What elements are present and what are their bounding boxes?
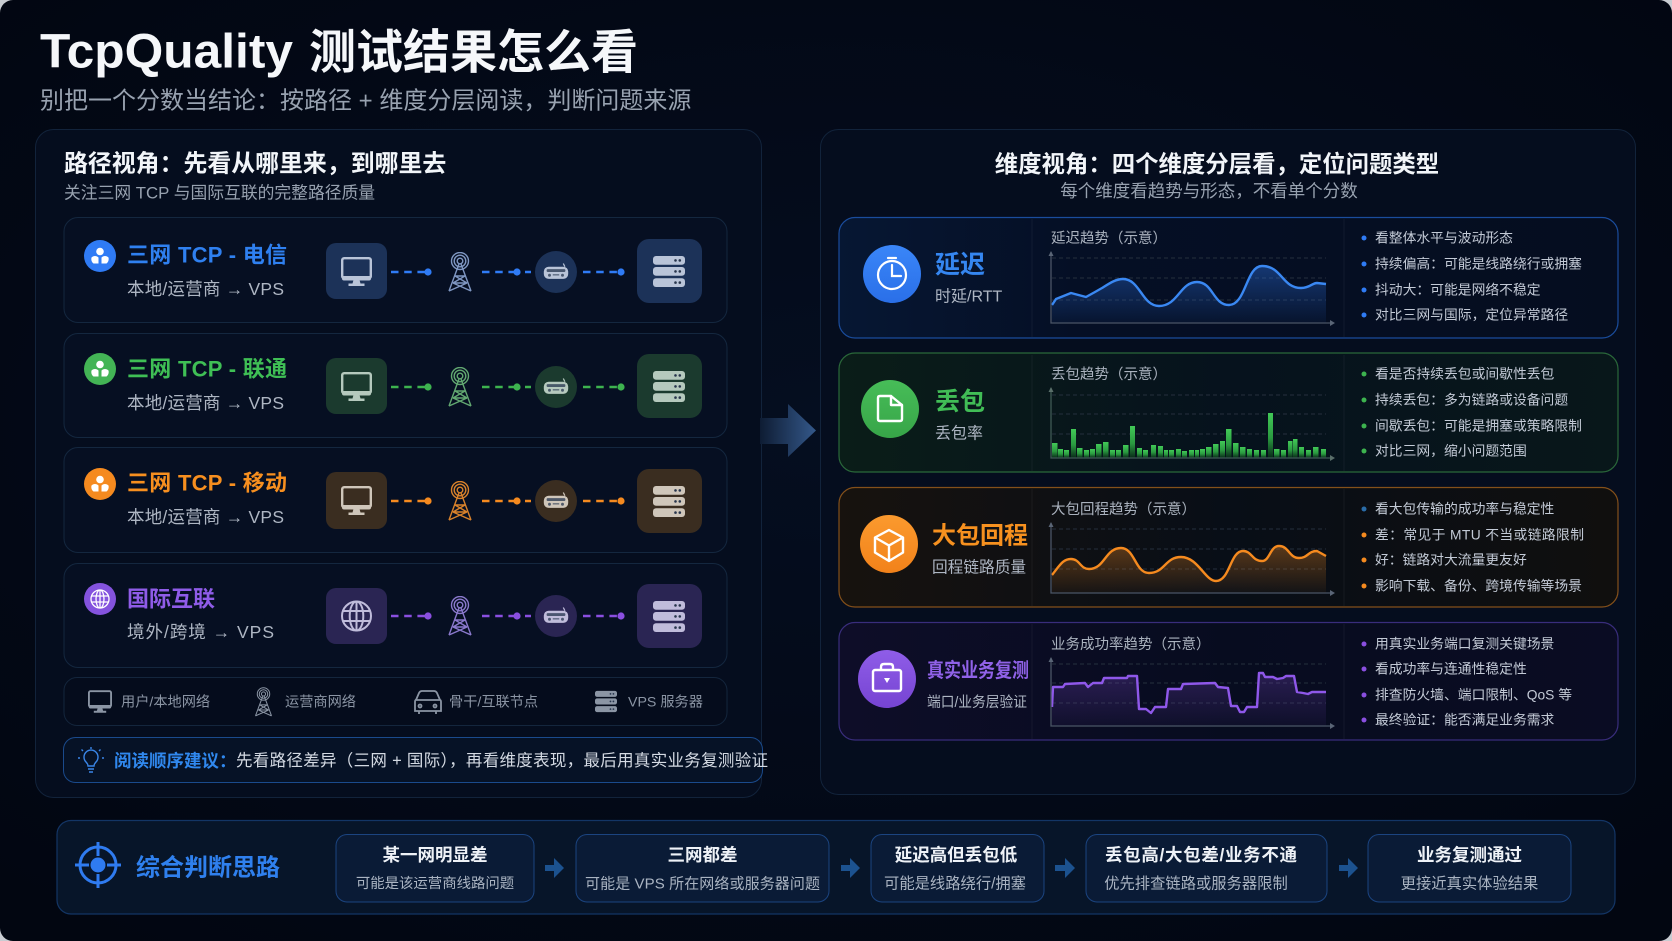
step 3: 延迟高但丢包低 xyxy=(895,845,1018,865)
legend item: user network: 用户/本地网络 xyxy=(121,694,210,710)
bullet list: real service retest: 看成功率与连通性稳定性 xyxy=(1375,660,1527,676)
bullet list: packet loss: 持续丢包：多为链路或设备问题 xyxy=(1375,392,1568,408)
dimension row: real service retest xyxy=(839,622,1618,740)
panel: dimension perspective xyxy=(820,130,1636,794)
bullet list: large packet return: 好：链路对大流量更友好 xyxy=(1375,552,1527,568)
bullet list: packet loss xyxy=(1362,366,1582,458)
icon: document xyxy=(861,380,919,438)
step 4: 优先排查链路或服务器限制 xyxy=(1104,876,1288,892)
panel: path perspective xyxy=(36,130,768,798)
bullet list: latency: 看整体水平与波动形态 xyxy=(1375,230,1513,246)
dimension description: 丢包率 xyxy=(935,424,983,442)
title xyxy=(40,26,638,78)
step 4: 丢包高/大包差/业务不通 xyxy=(1105,845,1298,865)
dimension row: latency xyxy=(839,218,1618,338)
dimension description: 时延/RTT xyxy=(935,288,1002,306)
step 2: 三网都差 xyxy=(668,845,738,865)
bullet list: large packet return: 差：常见于 MTU 不当或链路限制 xyxy=(1375,528,1584,542)
step 4 xyxy=(1086,834,1327,902)
dimension name: latency: 延迟 xyxy=(935,251,985,279)
tip text: 阅读顺序建议： xyxy=(114,751,236,771)
icon: unicom badge xyxy=(84,353,116,385)
chart title: 丢包趋势（示意） xyxy=(1051,365,1167,383)
tip text: 先看路径差异（三网 + 国际），再看维度表现，最后用真实业务复测验证 xyxy=(236,751,768,770)
line chart: latency xyxy=(1048,251,1335,326)
dimension panel subheading: 每个维度看趋势与形态，不看单个分数 xyxy=(1060,181,1358,201)
title: 测试结果怎么看 xyxy=(309,26,638,78)
route description: 本地/运营商 → VPS xyxy=(127,393,284,413)
title: TcpQuality xyxy=(40,26,293,78)
icon: mobile badge xyxy=(84,468,116,500)
chart title: 业务成功率趋势（示意） xyxy=(1051,635,1210,653)
route description: 本地/运营商 → VPS xyxy=(127,279,284,299)
subtitle: 别把一个分数当结论：按路径 + 维度分层阅读，判断问题来源 xyxy=(40,88,691,114)
arrow: step 4 to 5 xyxy=(1339,858,1358,878)
chart title: 延迟趋势（示意） xyxy=(1051,229,1167,247)
legend item: VPS server xyxy=(595,691,703,712)
dimension panel heading: 维度视角：四个维度分层看，定位问题类型 xyxy=(995,150,1439,177)
icon: target xyxy=(75,842,121,888)
flow heading: 综合判断思路 xyxy=(136,854,280,882)
arrow: step 1 to 2 xyxy=(545,858,564,878)
legend item: backbone node xyxy=(415,691,538,714)
route diagram: international xyxy=(326,584,702,648)
arrow: from path view to dimension view xyxy=(760,404,816,457)
path panel heading: 路径视角：先看从哪里来，到哪里去 xyxy=(64,150,446,178)
dimension row: large packet return xyxy=(839,488,1618,607)
chart title: 大包回程趋势（示意） xyxy=(1051,500,1196,518)
route name: mobile: 三网 TCP - 移动 xyxy=(127,470,287,496)
route name: unicom: 三网 TCP - 联通 xyxy=(127,356,287,382)
bullet list: packet loss: 对比三网，缩小问题范围 xyxy=(1375,442,1527,458)
bar chart: packet loss xyxy=(1048,387,1335,461)
arrow: step 3 to 4 xyxy=(1055,858,1075,878)
reading order tip xyxy=(64,738,768,782)
route name: telecom: 三网 TCP - 电信 xyxy=(127,242,287,268)
legend xyxy=(64,678,727,726)
step 2 xyxy=(576,834,829,902)
bullet list: latency: 抖动大：可能是网络不稳定 xyxy=(1375,282,1541,298)
bullet list: packet loss: 看是否持续丢包或间歇性丢包 xyxy=(1375,366,1555,382)
icon: clock xyxy=(863,245,921,303)
bullet list: large packet return xyxy=(1362,500,1584,594)
bullet list: latency: 持续偏高：可能是线路绕行或拥塞 xyxy=(1375,256,1582,272)
step 5 xyxy=(1368,834,1571,902)
step 1: 某一网明显差 xyxy=(382,845,488,865)
step 5: 更接近真实体验结果 xyxy=(1401,874,1538,892)
bullet list: latency: 对比三网与国际，定位异常路径 xyxy=(1375,308,1568,322)
path panel subheading: 关注三网 TCP 与国际互联的完整路径质量 xyxy=(64,184,375,202)
step 3: 可能是线路绕行/拥塞 xyxy=(884,874,1026,892)
legend item: backbone node: 骨干/互联节点 xyxy=(449,694,538,710)
legend item: user network xyxy=(89,691,210,713)
dimension description: 端口/业务层验证 xyxy=(927,694,1027,711)
bullet list: real service retest: 最终验证：能否满足业务需求 xyxy=(1375,712,1555,728)
line chart: large packet return xyxy=(1048,522,1335,596)
bullet list: real service retest: 用真实业务端口复测关键场景 xyxy=(1375,636,1554,652)
bullet list: packet loss: 间歇丢包：可能是拥塞或策略限制 xyxy=(1375,418,1582,434)
route description: 本地/运营商 → VPS xyxy=(127,507,284,527)
icon: light bulb xyxy=(78,747,104,772)
route description: 境外/跨境 → VPS xyxy=(127,622,274,642)
legend item: carrier network xyxy=(255,688,356,716)
bullet list: real service retest: 排查防火墙、端口限制、QoS 等 xyxy=(1375,686,1572,702)
step 2: 可能是 VPS 所在网络或服务器问题 xyxy=(585,876,820,892)
bullet list: latency xyxy=(1362,230,1582,322)
route diagram: unicom xyxy=(326,354,702,418)
step 1: 可能是该运营商线路问题 xyxy=(356,875,514,892)
bullet list: large packet return: 影响下载、备份、跨境传输等场景 xyxy=(1375,578,1582,594)
bullet list: large packet return: 看大包传输的成功率与稳定性 xyxy=(1375,500,1555,516)
route diagram: mobile xyxy=(326,469,702,533)
icon: international badge xyxy=(84,583,116,615)
route row: international xyxy=(64,564,727,668)
route row: unicom xyxy=(64,334,727,438)
dimension name: large packet return: 大包回程 xyxy=(932,522,1028,550)
legend item: VPS server: VPS 服务器 xyxy=(628,694,703,710)
step 3 xyxy=(871,834,1044,902)
step 5: 业务复测通过 xyxy=(1417,845,1522,865)
step 1 xyxy=(336,834,534,902)
dimension description: 回程链路质量 xyxy=(932,558,1026,576)
icon: cube xyxy=(860,515,918,573)
route name: international: 国际互联 xyxy=(127,586,215,612)
icon: case lock xyxy=(858,650,916,708)
route row: telecom xyxy=(64,218,727,322)
dimension name: real service retest: 真实业务复测 xyxy=(927,658,1029,682)
icon: telecom badge xyxy=(84,240,116,272)
dimension name: packet loss: 丢包 xyxy=(935,388,985,416)
arrow: step 2 to 3 xyxy=(841,858,860,878)
line chart: service success rate xyxy=(1048,657,1335,729)
panel: overall judgment flow xyxy=(57,820,1615,914)
legend item: carrier network: 运营商网络 xyxy=(285,694,356,710)
route row: mobile xyxy=(64,448,727,552)
route diagram: telecom xyxy=(326,239,702,303)
dimension row: packet loss xyxy=(839,353,1618,472)
bullet list: real service retest xyxy=(1362,636,1572,728)
